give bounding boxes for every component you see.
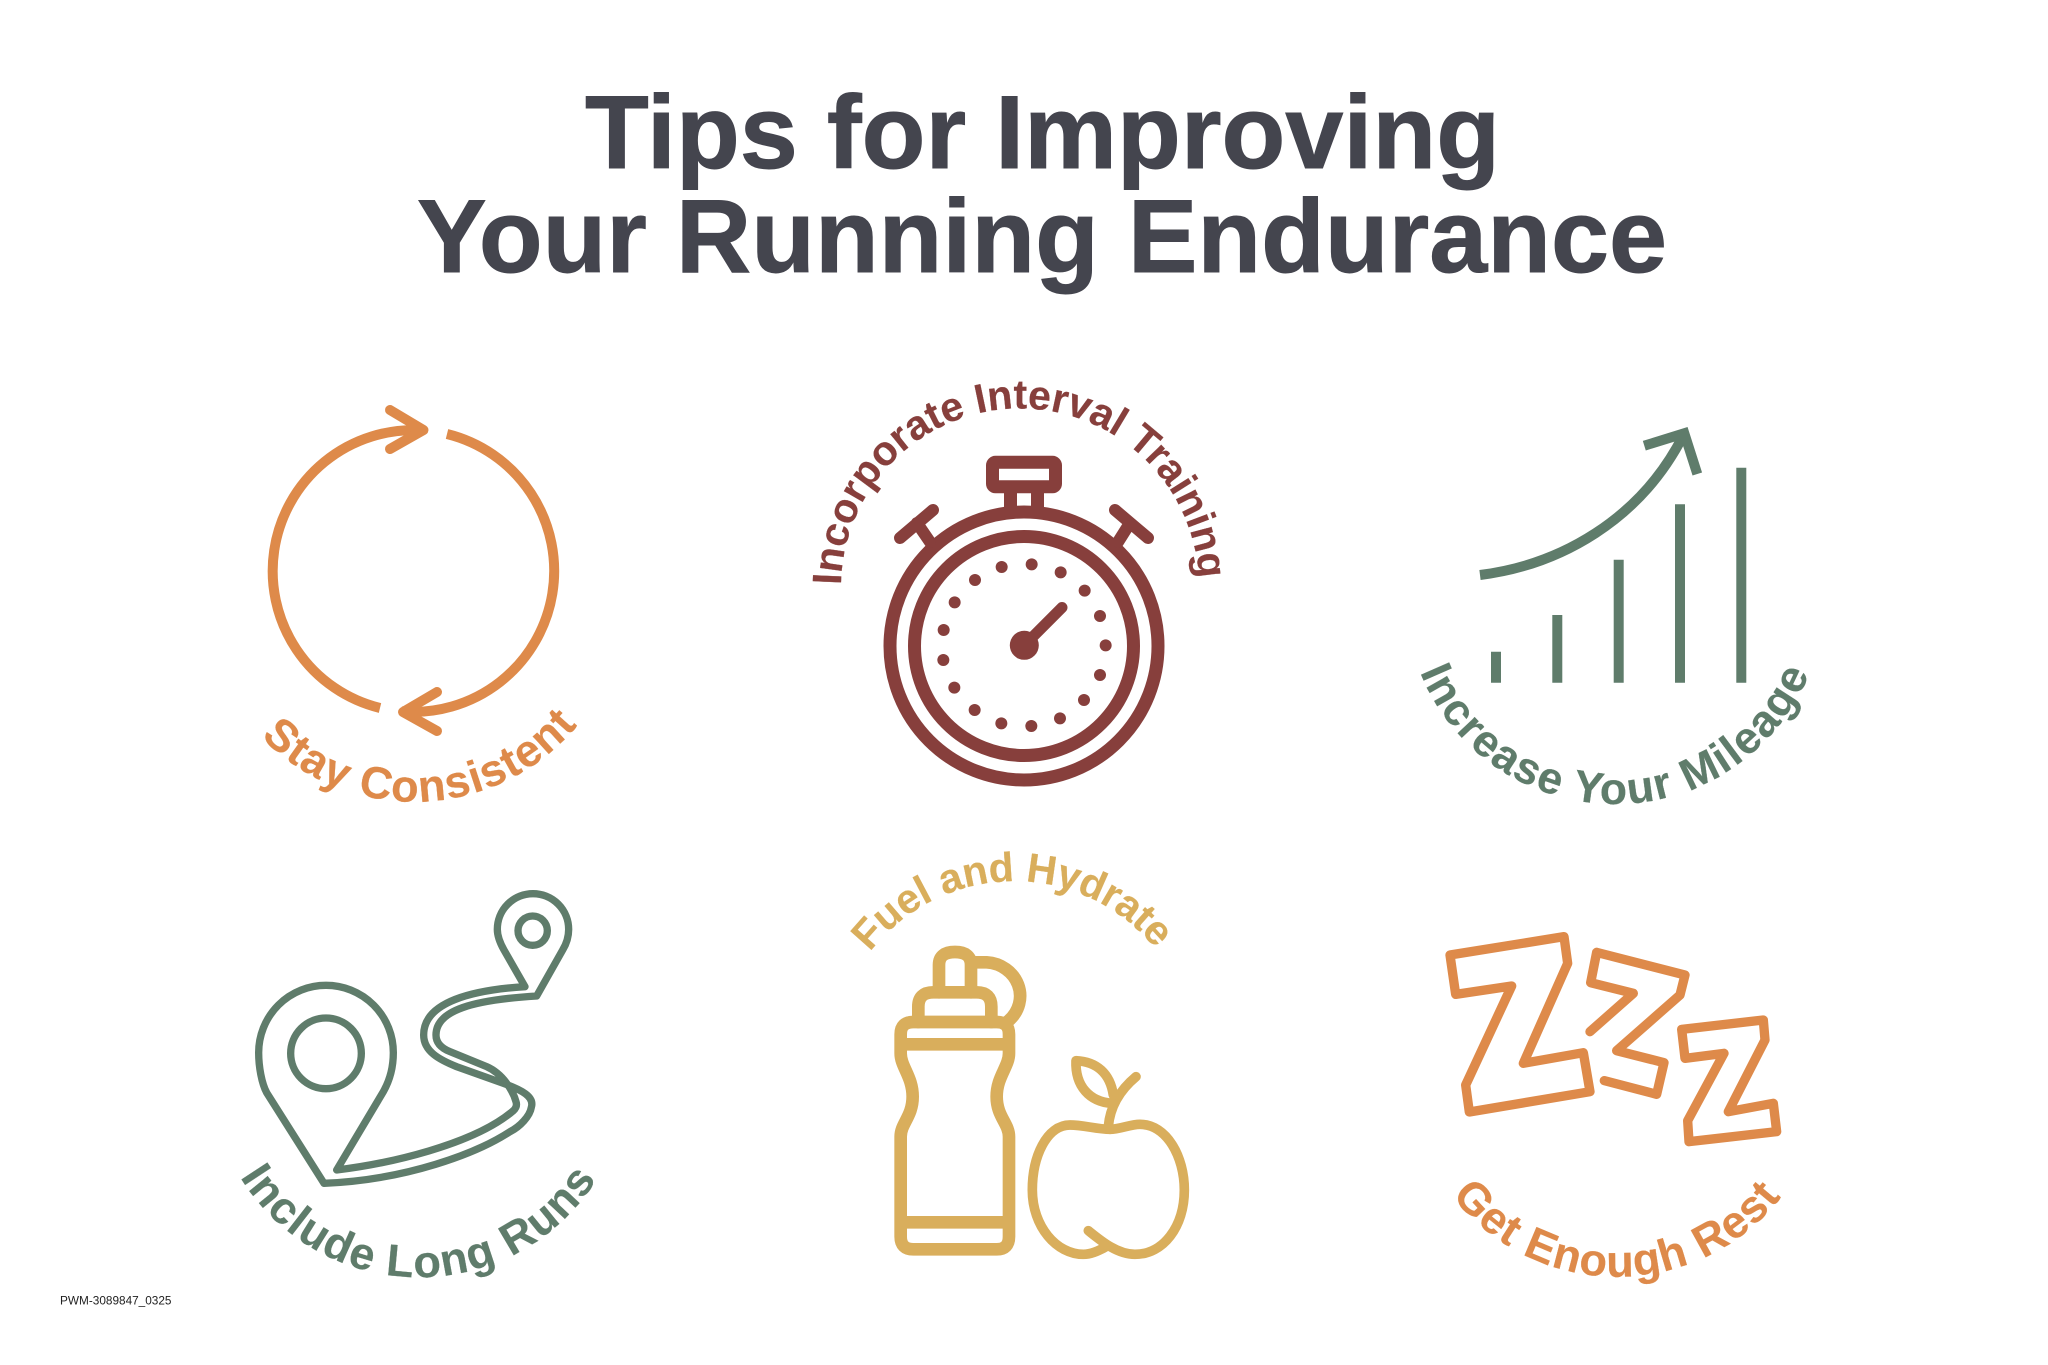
icon: rising bar chart with arrow bbox=[1480, 433, 1741, 683]
icon: water bottle bbox=[901, 952, 1020, 1249]
panel: fuel and hydrate bbox=[850, 851, 1190, 1260]
icon: route between map pins bbox=[259, 894, 569, 1183]
title bbox=[417, 75, 1667, 295]
icon: circular arrows bbox=[273, 410, 554, 731]
label: include long runs: Include Long Runs bbox=[242, 1162, 593, 1278]
label: incorporate interval training: Incorporate Interval Training bbox=[812, 382, 1220, 582]
icon: water bottle and apple bbox=[901, 952, 1184, 1254]
title: Your Running Endurance bbox=[417, 179, 1667, 295]
label: increase your mileage: Increase Your Mileage bbox=[1421, 662, 1806, 805]
title: Tips for Improving bbox=[585, 75, 1500, 191]
panel: stay consistent bbox=[265, 405, 577, 802]
icon: apple bbox=[1032, 1061, 1184, 1254]
panel: get enough rest bbox=[1445, 932, 1782, 1284]
label: stay consistent: Stay Consistent bbox=[265, 710, 577, 802]
label: fuel and hydrate: Fuel and Hydrate bbox=[850, 851, 1168, 950]
icon: stopwatch bbox=[890, 462, 1158, 780]
panel: increase your mileage bbox=[1421, 427, 1806, 805]
icon: sleeping zzz bbox=[1450, 937, 1777, 1142]
footer code: PWM-3089847_0325 bbox=[60, 1294, 172, 1308]
panel: incorporate interval training bbox=[812, 382, 1220, 786]
panel: include long runs bbox=[242, 890, 593, 1278]
label: get enough rest: Get Enough Rest bbox=[1458, 1182, 1781, 1284]
